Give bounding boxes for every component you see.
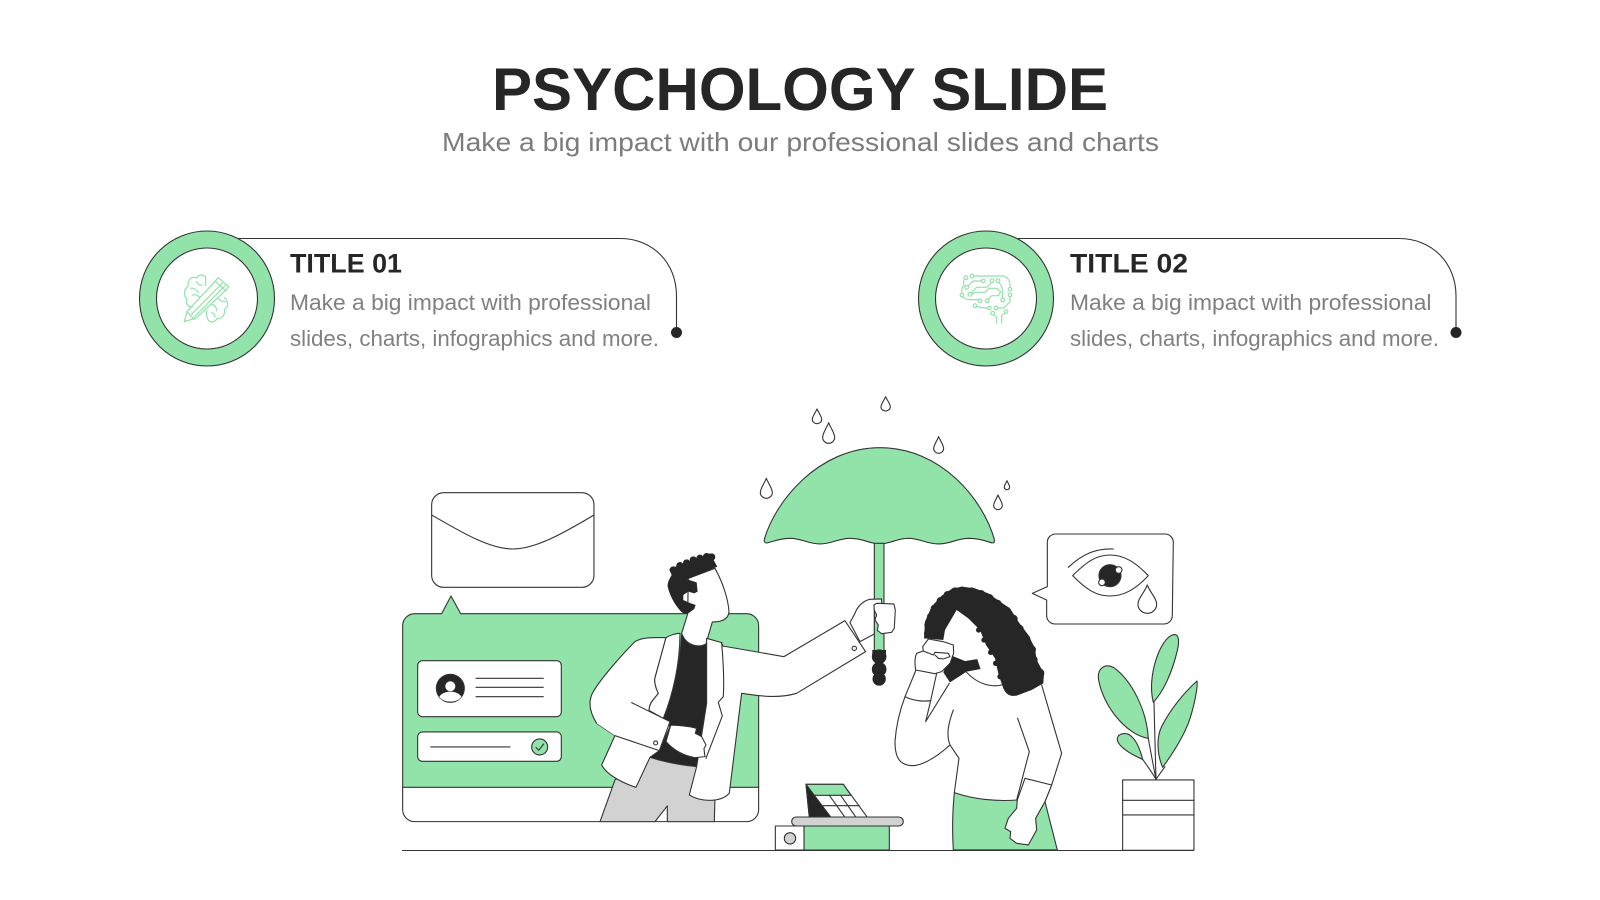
man lapel left bbox=[649, 633, 680, 718]
woman sleeve arm bbox=[895, 670, 950, 766]
ground line bbox=[402, 850, 1194, 852]
description 01: Make a big impact with professional bbox=[290, 290, 651, 315]
woman raised fist bbox=[915, 639, 954, 674]
ring badge 02 bbox=[918, 231, 1054, 366]
potted plant bbox=[1098, 635, 1197, 850]
woman face bbox=[943, 610, 997, 670]
icon: circuit brain bbox=[960, 274, 1012, 323]
woman curly hair bbox=[924, 587, 1044, 696]
profile card bbox=[418, 661, 561, 717]
woman lower hand bbox=[1005, 778, 1052, 845]
ring badge 01 bbox=[140, 231, 274, 366]
panel: title 01 bbox=[140, 231, 682, 366]
rain drops bbox=[760, 397, 1010, 510]
panel: title 02 bbox=[918, 231, 1462, 366]
description 01: slides, charts, infographics and more. bbox=[290, 326, 659, 351]
desk laptop bbox=[775, 784, 903, 850]
icon: crying eye bbox=[1068, 549, 1157, 613]
woman neck bbox=[943, 655, 981, 682]
man shirt bbox=[650, 635, 707, 767]
confirmation card bbox=[418, 732, 561, 761]
desk base bbox=[804, 826, 889, 850]
description 01 bbox=[290, 290, 659, 351]
heading 02: TITLE 02 bbox=[1070, 248, 1188, 278]
umbrella handle bbox=[872, 543, 886, 686]
man raised hand bbox=[850, 599, 895, 642]
subtitle: Make a big impact with our professional slides and charts bbox=[442, 127, 1159, 157]
man fist bbox=[666, 725, 706, 758]
woman torso bbox=[926, 673, 1062, 802]
description 02 bbox=[1070, 290, 1439, 351]
man jacket left bbox=[590, 638, 670, 787]
man cuff button bbox=[654, 741, 658, 745]
heading 01: TITLE 01 bbox=[290, 248, 402, 278]
connector dot 02 bbox=[1450, 327, 1462, 338]
man hair bbox=[668, 553, 717, 613]
envelope bubble bbox=[432, 493, 594, 587]
man trousers bbox=[600, 757, 715, 822]
connector line 01 bbox=[238, 238, 676, 332]
desk drawer bbox=[775, 826, 804, 850]
connector line 02 bbox=[1018, 238, 1456, 332]
laptop screen bbox=[806, 784, 867, 817]
umbrella bbox=[764, 448, 994, 544]
plant leaves bbox=[1098, 635, 1197, 767]
browser window panel bbox=[403, 596, 759, 822]
illustration: umbrella scene bbox=[402, 397, 1197, 850]
man forearm bbox=[597, 703, 670, 751]
woman skirt bbox=[953, 793, 1057, 850]
woman body lines bbox=[948, 672, 1062, 802]
man head bbox=[682, 568, 729, 646]
description 02: slides, charts, infographics and more. bbox=[1070, 326, 1439, 351]
plant stems bbox=[1143, 702, 1165, 779]
icon: brain and pencil bbox=[184, 275, 229, 322]
title: PSYCHOLOGY SLIDE bbox=[492, 56, 1108, 123]
woman bbox=[895, 587, 1062, 850]
connector dot 01 bbox=[671, 327, 682, 338]
plant pot bbox=[1123, 780, 1194, 850]
woman head and hair bbox=[915, 587, 1044, 696]
description 02: Make a big impact with professional bbox=[1070, 290, 1432, 315]
eye speech bubble bbox=[1032, 534, 1173, 624]
man bbox=[590, 553, 895, 822]
man jacket right with raised arm bbox=[689, 621, 866, 800]
desk top bbox=[792, 817, 903, 826]
